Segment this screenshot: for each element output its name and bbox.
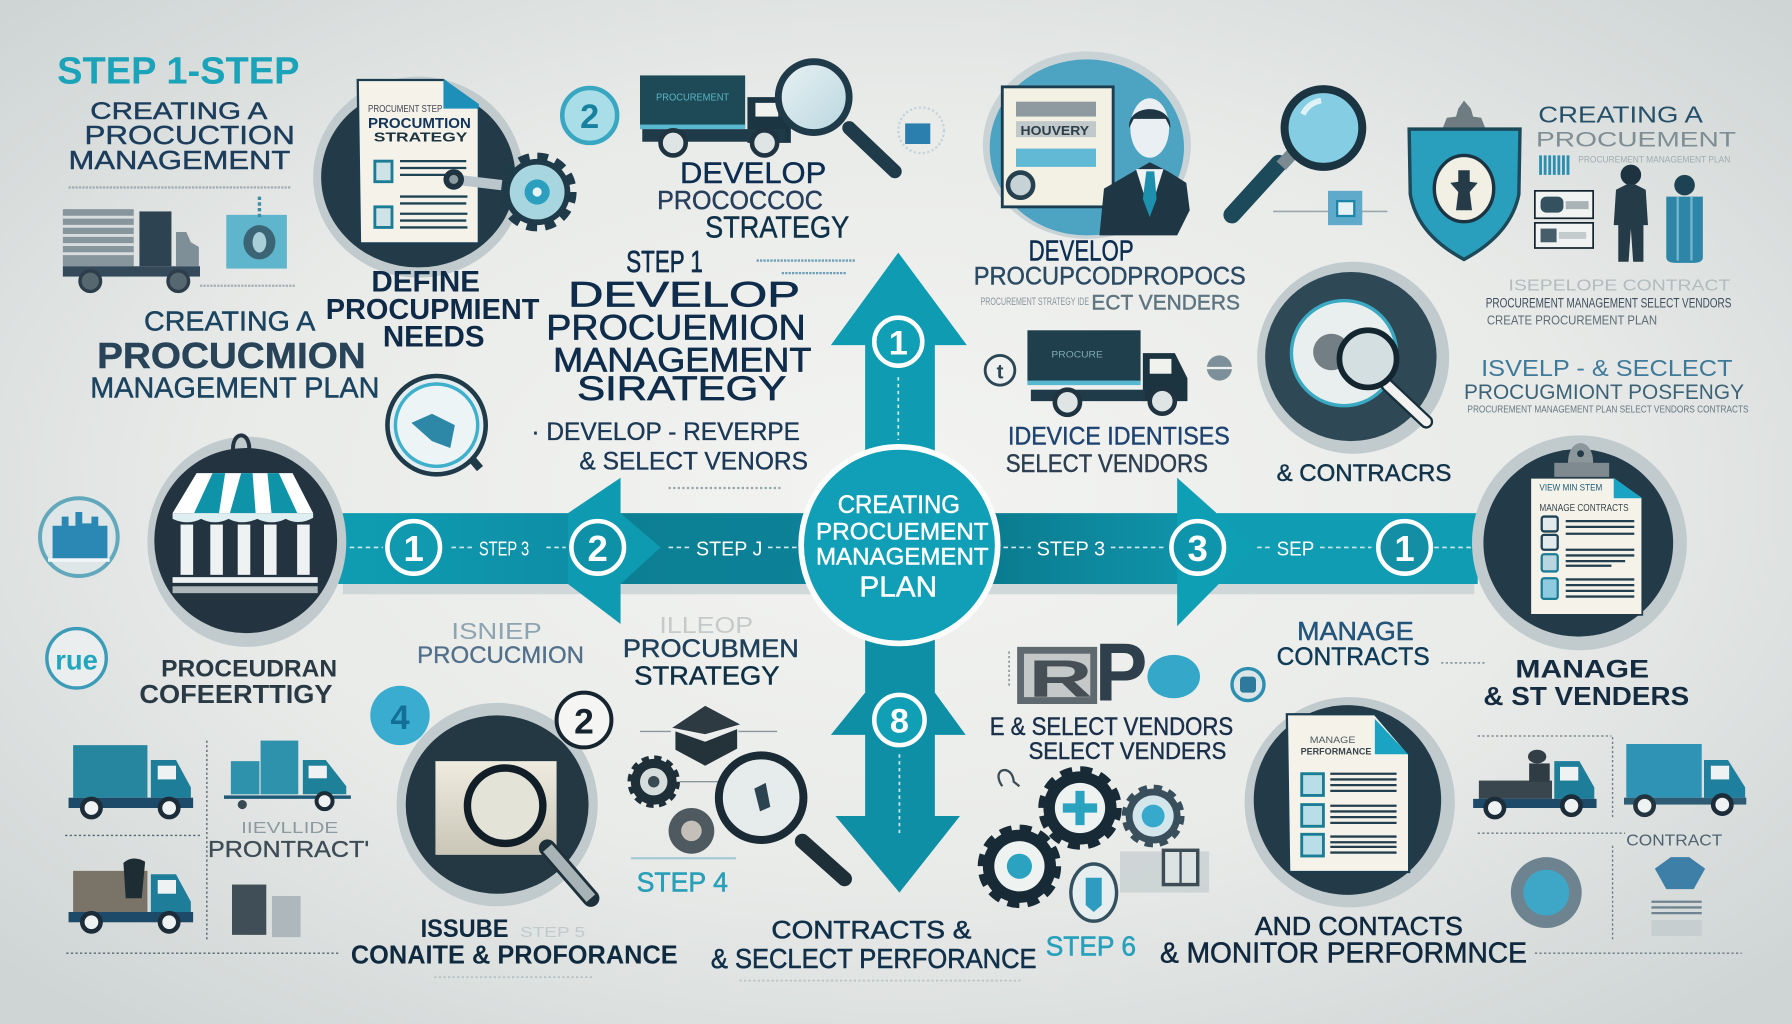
label: PROCOCCOC — [657, 185, 823, 215]
text block: manage contracts — [1277, 616, 1486, 671]
icon: small emblem — [1207, 355, 1232, 381]
right band — [1217, 513, 1478, 584]
step badge 1: 1 — [404, 528, 424, 569]
icon: dark truck — [1027, 330, 1187, 415]
icon: columns — [173, 525, 318, 593]
main arrow: up: 1 — [889, 324, 908, 362]
label: E & SELECT VENDORS — [990, 713, 1233, 741]
circle backdrop — [1257, 262, 1449, 454]
icon: barcode and faint caption — [1541, 154, 1730, 175]
central hub circle: PLAN — [859, 572, 937, 604]
label: contract: IIEVLLIDE — [241, 820, 338, 837]
icon: dark truck with magnifier: PROCUREMENT — [656, 93, 730, 104]
icon: document: MANAGE — [1310, 735, 1355, 745]
text block: procurement strategy left: COFEERTTIGY — [139, 679, 333, 709]
label: contract: PRONTRACT' — [208, 836, 369, 862]
label: ECT VENDERS — [1091, 290, 1240, 315]
icon: dark truck with magnifier — [640, 75, 791, 155]
icon: rfp letters: P — [1095, 628, 1147, 719]
main arrow: down — [831, 638, 966, 893]
icon: small scribble — [999, 770, 1019, 786]
badge: blue 4: 4 — [390, 699, 410, 737]
label: STEP 5 — [520, 925, 585, 941]
text block: develop procurement strategy lower: ILLEOP — [659, 612, 753, 638]
icon: round emblem — [669, 808, 714, 854]
label: SELECT VENDORS — [1006, 450, 1208, 478]
panel: rfp and select vendors — [983, 628, 1264, 921]
panel: contracts magnifier circle — [1257, 262, 1451, 487]
label: step 6: STEP 6 — [1046, 930, 1136, 961]
panel: lower-left trucks — [65, 741, 369, 953]
band labels: STEP J — [696, 537, 762, 560]
heading: step 1-step: STEP 1-STEP — [57, 49, 299, 91]
step badge 3: 3 — [1188, 528, 1208, 569]
icon: business person — [1099, 98, 1190, 235]
panel: vendor truck and identify vendors — [985, 330, 1232, 478]
icon: faint blue emblem — [898, 107, 944, 153]
text block: procurement strategy left: PROCEUDRAN — [161, 656, 337, 683]
icon: document: HOUVERY — [1021, 124, 1090, 138]
text block: manage contracts: CONTRACTS — [1277, 643, 1430, 671]
icon: teal glyph badge — [47, 629, 106, 688]
text block: creating a procurement management plan — [90, 305, 379, 405]
label: DEFINE — [371, 265, 480, 298]
circle backdrop — [1245, 697, 1455, 907]
badge: 2 — [557, 693, 611, 747]
icon: store awning — [173, 473, 313, 522]
icon: man in suit — [1614, 165, 1648, 262]
text block: creating a procurement — [1536, 101, 1736, 151]
text block: manage contracts: MANAGE — [1297, 616, 1414, 646]
icon: hook — [233, 435, 249, 453]
text block: step 1 develop procurement management strategy: STEP 1 — [626, 244, 703, 279]
icon: gear and lens — [1291, 301, 1426, 422]
step badge 1 — [387, 521, 440, 574]
icon: document — [1530, 478, 1642, 615]
right arrowhead — [1177, 478, 1255, 626]
circle backdrop — [983, 51, 1191, 239]
text block: procurement strategy left — [139, 656, 337, 709]
text block: creating a procurement: PROCUEMENT — [1536, 126, 1736, 151]
label — [990, 713, 1233, 765]
label: & MONITOR PERFORMNCE — [1160, 937, 1527, 969]
circle backdrop — [397, 703, 598, 906]
label: contract — [208, 820, 369, 862]
icon: connector lines — [640, 731, 777, 782]
label — [326, 265, 540, 353]
text block: issue procurement: PROCUCMION — [417, 642, 584, 669]
icon: dark truck — [1473, 750, 1597, 817]
icon: teal glyph badge: rue — [55, 645, 98, 676]
text block: issue procurement: ISNIEP — [451, 618, 542, 644]
text block: step 1 develop procurement management strategy: & SELECT VENORS — [579, 448, 808, 476]
band shadow — [343, 584, 1474, 594]
panel: define procurement needs — [313, 77, 571, 353]
text block: creating a procurement management: CREATING A — [90, 98, 267, 125]
icon: gear — [503, 158, 571, 226]
text block: manage and select vendors: & ST VENDERS — [1483, 681, 1689, 711]
label — [1160, 911, 1527, 969]
text block: step 1 develop procurement management strategy — [531, 244, 855, 488]
text block: step 1 develop procurement management strategy: PROCUEMION — [546, 307, 806, 347]
icon: flatbed truck with boxes — [224, 741, 351, 809]
text block: develop procurement strategy lower: STRATEGY — [634, 661, 779, 691]
label: STRATEGY — [705, 210, 849, 245]
icon: skyline badge — [40, 498, 118, 576]
label: contract: CONTRACT — [1626, 833, 1723, 850]
icon: small pendant — [1232, 669, 1264, 701]
step badge 4: 1 — [1394, 528, 1415, 569]
icon: chip — [1273, 191, 1387, 225]
text block: creating a procurement management plan: MANAGEMENT PLAN — [90, 373, 379, 405]
panel: right document circle — [1472, 435, 1687, 650]
icon: document: PROCUMTION — [368, 116, 471, 132]
text block: develop procurement strategy lower: PROCUBMEN — [623, 635, 799, 663]
icon: small round glyph — [985, 355, 1015, 385]
icon: barcode and faint caption: PROCUREMENT MANAGEMENT PLAN — [1578, 154, 1730, 164]
panel: develop procurement strategy (top) — [562, 62, 944, 245]
badge: 2: 2 — [580, 98, 599, 136]
central hub circle: CREATING — [838, 491, 960, 519]
icon: rfp letters — [1009, 628, 1200, 719]
label: DEVELOP — [1029, 236, 1134, 268]
icon: dark gear — [631, 759, 677, 805]
icon: rfp letters: R — [1029, 650, 1093, 709]
icon: magnifier — [467, 768, 591, 898]
text block: develop procurement strategy lower — [623, 612, 799, 691]
main arrow: down: 8 — [890, 703, 909, 741]
left arrowhead — [568, 478, 661, 624]
icon: monitor — [1120, 850, 1209, 893]
label: & CONTRACRS — [1277, 460, 1451, 487]
band labels — [479, 537, 1314, 560]
badge: 2 — [562, 88, 617, 143]
faint text rows: ISEPELOPE CONTRACT — [1509, 277, 1731, 294]
panel: lower-right trucks — [1473, 736, 1746, 953]
text block: manage and select vendors: MANAGE — [1515, 656, 1649, 684]
icon: dark truck: PROCURE — [1051, 350, 1103, 360]
text block: creating a procurement management: MANAGEMENT — [69, 145, 290, 175]
icon: shield and text lines — [1651, 857, 1705, 936]
icon: document: STRATEGY — [374, 131, 468, 145]
icon: document: VIEW MIN STEM — [1539, 482, 1602, 492]
label: IDEVICE IDENTISES — [1008, 423, 1230, 451]
icon: teal tagged box — [226, 197, 287, 269]
panel: develop procurement proposals (person) — [974, 51, 1246, 315]
text block: select procurement policy — [1464, 355, 1749, 416]
icon: clipboard clip — [1554, 443, 1609, 478]
text block: creating a procurement management — [69, 98, 295, 175]
text block: manage and select vendors — [1483, 656, 1689, 711]
dark left band — [617, 513, 811, 584]
central hub circle: PROCUEMENT — [816, 518, 989, 545]
step badge 2: 2 — [588, 528, 608, 569]
label: AND CONTACTS — [1255, 911, 1463, 941]
text block: step 1 develop procurement management strategy: · DEVELOP - REVERPE — [531, 418, 800, 446]
icon: grey truck — [63, 209, 200, 291]
circle backdrop — [1472, 435, 1687, 650]
step badge 2 — [571, 521, 624, 574]
band labels: SEP — [1277, 537, 1314, 560]
icon: id cards — [1535, 191, 1593, 248]
icon: large magnifier — [1232, 89, 1362, 215]
icon: document: MANAGE CONTRACTS — [1539, 503, 1629, 514]
central hub circle: MANAGEMENT — [816, 544, 989, 571]
text block: contracts and select performance — [711, 916, 1037, 981]
icon: document — [1002, 87, 1113, 207]
text block: contracts and select performance: & SECLECT PERFORANCE — [711, 943, 1037, 974]
panel: top-right magnifier and shield — [1232, 89, 1736, 328]
panel: top-left step heading — [57, 49, 299, 291]
label: NEEDS — [383, 320, 485, 353]
label: DEVELOP — [680, 157, 826, 190]
panel: lower-right document circle — [1160, 697, 1527, 969]
icon: brown truck — [69, 859, 193, 931]
left band — [338, 513, 578, 584]
icon: gear cluster — [983, 771, 1181, 921]
label — [974, 236, 1246, 315]
label: PROCUPMIENT — [326, 294, 540, 326]
dark right band — [989, 513, 1183, 584]
text block: creating a procurement management plan: PROCUCMION — [97, 335, 366, 376]
text block: step 1 develop procurement management strategy: SIRATEGY — [577, 370, 786, 408]
central hub circle — [801, 447, 998, 643]
text block: creating a procurement management: PROCUCTION — [85, 120, 295, 150]
panel: lower-center icons — [631, 705, 845, 897]
badge: 2: 2 — [574, 702, 594, 742]
text block: step 1 develop procurement management strategy: DEVELOP — [568, 274, 800, 314]
label — [1006, 423, 1230, 478]
panel: left store circle — [147, 435, 346, 647]
badge: blue 4 — [370, 686, 430, 745]
label — [657, 157, 849, 245]
label: CONAITE & PROFORANCE — [351, 939, 678, 969]
icon: gear handle — [443, 169, 502, 190]
step badge 3 — [1171, 521, 1224, 574]
icon: document: PERFORMANCE — [1301, 746, 1371, 756]
icon: envelope panel — [435, 761, 557, 855]
label: PROCUPCODPROPOCS — [974, 263, 1246, 291]
icon: round magnifier — [387, 376, 486, 474]
faint text rows: CREATE PROCUREMENT PLAN — [1487, 314, 1657, 328]
step badge 4 — [1378, 521, 1431, 574]
text block: creating a procurement: CREATING A — [1538, 101, 1704, 127]
icon: shield — [1409, 101, 1520, 259]
label: SELECT VENDERS — [1029, 738, 1226, 765]
circle backdrop — [313, 77, 523, 278]
icon: blurred dark parcels — [232, 885, 301, 937]
icon: small round glyph: t — [997, 360, 1004, 383]
label — [351, 915, 678, 969]
panel: issue contracts circle — [351, 686, 678, 977]
text block: contracts and select performance: CONTRACTS & — [771, 916, 972, 944]
icon: magnifier — [719, 755, 845, 879]
label: step 4: STEP 4 — [637, 866, 728, 897]
text block: issue procurement — [417, 618, 584, 669]
icon: document — [1287, 714, 1409, 872]
icon: teal figure — [1666, 175, 1703, 263]
icon: magnifier — [778, 62, 895, 171]
label: PROCUREMENT STRATEGY IDE — [981, 296, 1089, 308]
text block: select procurement policy: ISVELP - & SECLECT — [1481, 355, 1733, 381]
text block: creating a procurement management plan: CREATING A — [144, 305, 316, 336]
icon: blue truck — [1624, 744, 1746, 815]
circle backdrop — [147, 437, 346, 647]
icon: grey gear with teal centre — [1511, 857, 1582, 928]
faint text rows — [1486, 277, 1731, 328]
icon: document — [358, 79, 479, 243]
band labels: STEP 3 — [479, 537, 529, 560]
main arrow: horizontal band — [338, 478, 1478, 626]
icon: teal truck — [69, 745, 193, 817]
icon: document: PROCUMENT STEP — [368, 104, 442, 115]
main arrow: up — [831, 253, 967, 453]
text block: select procurement policy: PROCUGMIONT POSFENGY — [1464, 379, 1744, 404]
icon: cube — [671, 705, 742, 766]
text block: step 1 develop procurement management strategy: MANAGEMENT — [553, 341, 811, 379]
label: ISSUBE — [421, 915, 509, 943]
band labels: STEP 3 — [1037, 537, 1105, 560]
